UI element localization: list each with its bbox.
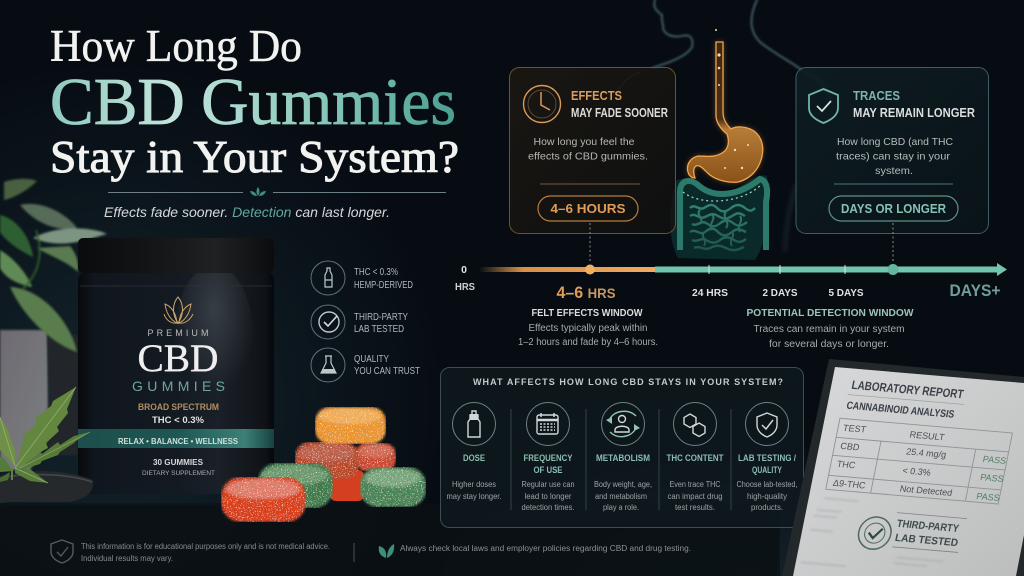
timeline labels: 5 DAYS (828, 287, 864, 299)
report content: CANNABINOID ANALYSIS (845, 400, 955, 421)
table values: PASS (982, 454, 1007, 466)
footer legal note: Always check local laws and employer policies regarding CBD and drug testing. (400, 544, 691, 553)
factor: lab testing (736, 402, 798, 512)
red back left gummy (295, 442, 359, 479)
table values: RESULT (909, 429, 946, 442)
panel: what affects (440, 368, 804, 528)
badge: lab tested: LAB TESTED (354, 324, 404, 335)
factor: frequency: OF USE (534, 465, 562, 476)
table values: Not Detected (899, 484, 953, 498)
icon: shield (809, 89, 838, 123)
factor: metabolism: METABOLISM (596, 453, 650, 464)
gummy jar: BROAD SPECTRUM (138, 402, 219, 413)
factor: thc content: can impact drug (668, 492, 722, 501)
panel: traces: traces) can stay in your (836, 150, 951, 162)
potential detection window: POTENTIAL DETECTION WINDOW (746, 308, 914, 319)
gummy jar: 30 GUMMIES (153, 458, 204, 467)
panel: what affects: WHAT AFFECTS HOW LONG CBD STAYS IN YOUR SYSTEM? (473, 377, 783, 387)
felt effects window: 1–2 hours and fade by 4–6 hours. (518, 337, 658, 348)
footer disclaimer: Individual results may vary. (81, 554, 173, 563)
felt effects window (518, 308, 658, 348)
felt effects window: FELT EFFECTS WINDOW (532, 308, 643, 319)
panel: effects (510, 68, 676, 234)
panel: traces: system. (875, 165, 913, 177)
badge: hemp derived: HEMP-DERIVED (354, 280, 413, 291)
timeline (455, 223, 1007, 350)
gummies pile (221, 407, 426, 522)
blurred leaves (0, 179, 107, 352)
table values: Δ9-THC (832, 478, 867, 491)
panel: effects: effects of CBD gummies. (528, 150, 648, 162)
panel: traces (796, 68, 988, 234)
pill: 4–6 hours: 4–6 HOURS (550, 201, 626, 216)
green right gummy (360, 467, 426, 507)
label band (78, 429, 274, 448)
factor: frequency: lead to longer (524, 492, 572, 501)
factor: frequency (522, 402, 574, 512)
red back right gummy (355, 443, 396, 471)
stomach and intestines illustration (670, 29, 769, 260)
report content (801, 377, 1021, 576)
factor: dose: may stay longer. (446, 492, 502, 501)
icon: clock (524, 86, 560, 122)
gummy jar: CBD (138, 337, 218, 380)
table values: THC (836, 459, 857, 470)
footer legal note (379, 544, 691, 558)
badge: quality: QUALITY (354, 354, 389, 365)
footer disclaimer: This information is for educational purposes only and is not medical advice. (81, 542, 330, 551)
logo leaf (164, 297, 193, 324)
icon: leaf (379, 544, 394, 558)
felt effects window: Effects typically peak within (528, 323, 648, 334)
cannabis leaf and plate (0, 387, 93, 503)
factor: lab testing: Choose lab-tested, (736, 480, 798, 489)
gummy jar (78, 238, 274, 494)
pill: days or longer: DAYS OR LONGER (841, 201, 947, 216)
factor: thc content: THC CONTENT (666, 453, 724, 464)
report table (826, 418, 1012, 504)
report content: LABORATORY REPORT (850, 378, 965, 401)
panel: traces: TRACES (853, 89, 900, 103)
timeline labels: 24 HRS (692, 287, 728, 299)
potential detection window: Traces can remain in your system (754, 324, 904, 335)
body silhouette (616, 0, 830, 250)
panel: effects: How long you feel the (534, 136, 635, 148)
badge: lab tested (311, 305, 408, 339)
timeline labels: HRS (455, 281, 475, 293)
gummy jar: RELAX • BALANCE • WELLNESS (118, 436, 238, 446)
factor: metabolism: Body weight, age, (594, 480, 652, 489)
table values: PASS (976, 491, 1001, 503)
red front gummy (221, 477, 306, 522)
table values: PASS (979, 472, 1005, 484)
table values: < 0.3% (902, 465, 932, 478)
report content: THIRD-PARTY (896, 518, 960, 535)
gummy jar: PREMIUM (148, 328, 208, 338)
esophagus and stomach (687, 42, 763, 182)
factor: metabolism: and metabolism (595, 492, 647, 501)
icon: shield (51, 540, 73, 563)
gummy jar: THC < 0.3% (152, 415, 205, 426)
factor: lab testing: high-quality (747, 492, 787, 501)
factor: metabolism (594, 402, 652, 512)
pill: days or longer (829, 196, 958, 221)
factor: lab testing: LAB TESTING / (738, 453, 796, 464)
title: Stay in Your System? (50, 131, 459, 182)
gummy jar: DIETARY SUPPLEMENT (142, 471, 215, 477)
badge: lab tested: THIRD-PARTY (354, 312, 408, 323)
factor: frequency: detection times. (522, 503, 574, 512)
report content: LAB TESTED (894, 532, 959, 549)
timeline labels: DAYS+ (950, 281, 1001, 300)
table values: TEST (842, 423, 867, 435)
badges (311, 261, 420, 382)
timeline labels: 2 DAYS (762, 287, 798, 299)
factor: thc content (666, 402, 724, 512)
factor: thc content: Even trace THC (670, 480, 721, 489)
intestines (670, 175, 769, 260)
subtitle: Effects fade sooner. Detection can last longer. (104, 204, 390, 220)
factor: lab testing: QUALITY (752, 465, 782, 476)
title: CBD Gummies (50, 65, 456, 139)
potential detection window (746, 308, 914, 350)
factor: lab testing: products. (751, 503, 783, 512)
factor: dose: Higher doses (452, 480, 496, 489)
table values: CBD (840, 441, 861, 452)
title divider with leaf (108, 187, 446, 196)
title (50, 21, 459, 182)
lab report clipboard (782, 359, 1024, 576)
panel: traces: How long CBD (and THC (837, 136, 953, 148)
table values: 25.4 mg/g (905, 446, 947, 460)
badge: quality (311, 348, 420, 382)
badge: hemp derived (311, 261, 413, 295)
footer disclaimer (51, 540, 330, 563)
factor: frequency: FREQUENCY (524, 453, 573, 464)
panel: effects: MAY FADE SOONER (571, 106, 668, 120)
green left gummy (258, 463, 333, 508)
panel: effects: EFFECTS (571, 89, 622, 103)
factor: dose (446, 402, 502, 501)
factor: thc content: test results. (675, 503, 715, 512)
pill: 4–6 hours (538, 196, 638, 221)
badge: hemp derived: THC < 0.3% (354, 267, 398, 278)
table surface (0, 503, 780, 576)
lower red piece (330, 470, 364, 501)
badge: quality: YOU CAN TRUST (354, 366, 420, 377)
panel: traces: MAY REMAIN LONGER (853, 106, 975, 120)
pot (0, 330, 50, 470)
orange gummy (315, 407, 386, 444)
plant and pot (0, 179, 107, 470)
factor: dose: DOSE (463, 453, 485, 464)
table values (831, 423, 1012, 503)
timeline labels: 4–6 HRS (556, 283, 616, 302)
stamp (856, 516, 894, 550)
timeline labels: 0 (461, 264, 467, 276)
factor: metabolism: play a role. (603, 503, 639, 512)
potential detection window: for several days or longer. (769, 339, 889, 350)
factor: frequency: Regular use can (522, 480, 574, 489)
title: How Long Do (50, 21, 302, 71)
timeline labels (455, 264, 1001, 302)
gummy jar: GUMMIES (132, 378, 225, 394)
